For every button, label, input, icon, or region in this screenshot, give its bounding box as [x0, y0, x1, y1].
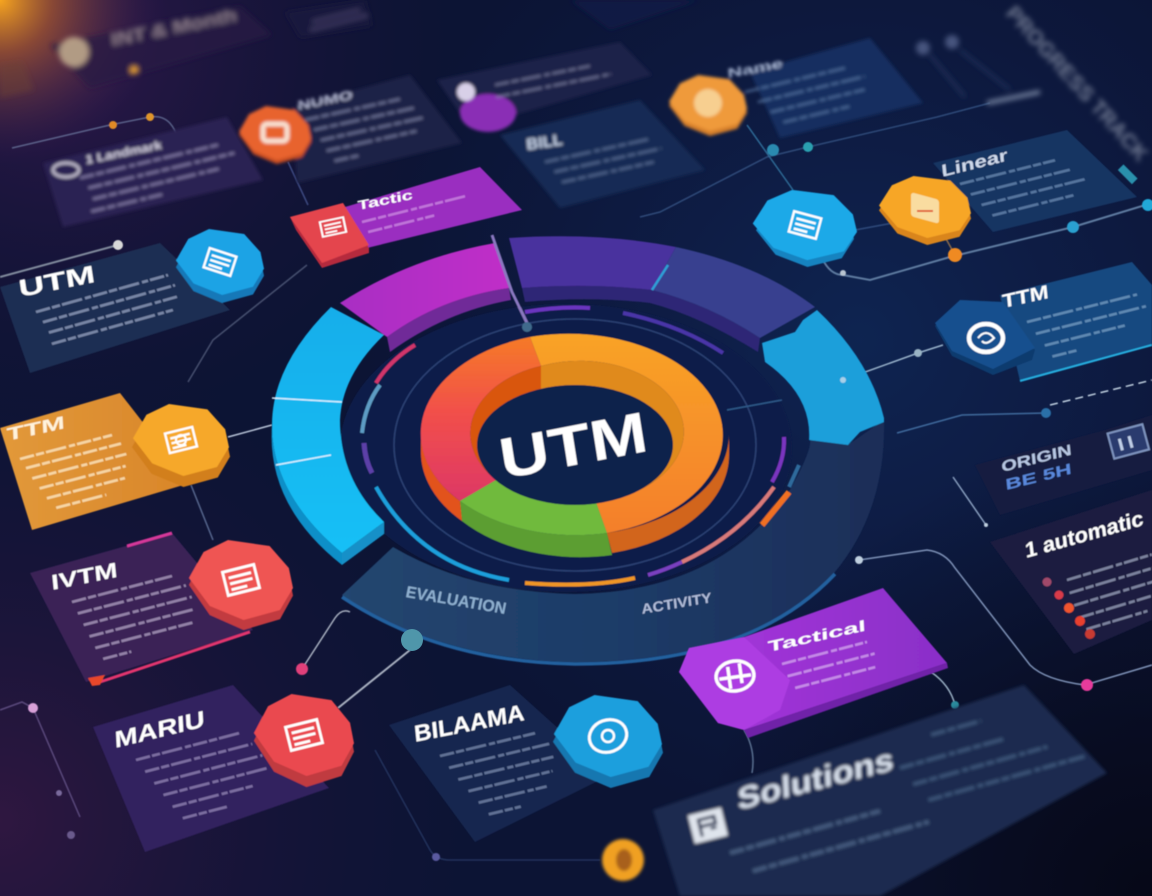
heading: MARIU — [114, 706, 205, 753]
panel: top right blurred vertical text: PROGRESS TRACK — [1001, 2, 1152, 167]
text lines — [1067, 554, 1152, 632]
segment: indigo top — [509, 236, 815, 352]
icon: navy hexagon — [935, 300, 1035, 375]
donut sides — [421, 434, 729, 557]
icon: red hexagon — [189, 540, 293, 630]
segment: blue right — [762, 310, 884, 445]
text lines — [20, 433, 136, 513]
text lines — [730, 800, 929, 875]
donut: red segment — [421, 337, 541, 501]
icon: orange coin — [602, 839, 644, 881]
heading: BILAAMA — [413, 699, 526, 747]
icon: purple blob — [460, 94, 516, 132]
icon: small frame — [1108, 424, 1149, 459]
connector stem — [492, 235, 528, 325]
icon: blue hexagon — [553, 695, 663, 788]
heading: NUMO — [297, 87, 353, 113]
heading: IVTM — [50, 558, 118, 595]
icon: red-orange hexagon — [239, 106, 311, 164]
heading: Tactical — [767, 618, 866, 656]
icon: yellow hexagon — [132, 404, 230, 487]
donut: green segment — [460, 480, 607, 535]
icon: yellow hexagon — [879, 176, 971, 245]
icon: blue hexagon — [176, 229, 264, 303]
text lines — [136, 729, 277, 825]
text lines — [305, 96, 430, 164]
heading: UTM: UTM — [17, 261, 97, 303]
icon: red hexagon — [254, 694, 354, 787]
panel: purple banner with red tag — [290, 167, 522, 268]
donut: inner wall — [470, 361, 684, 502]
arc accents — [362, 308, 799, 585]
heading: top-left: INT & Month — [110, 5, 237, 50]
heading: 1 automatic — [1024, 506, 1145, 563]
heading: Solutions — [737, 741, 894, 817]
panel: purple callout — [679, 588, 948, 738]
title: UTM: UTM — [495, 401, 652, 491]
inner dark disc — [340, 304, 792, 592]
text lines — [72, 573, 203, 662]
panel: top-left blurred — [0, 0, 700, 98]
panel: orange — [0, 393, 230, 530]
text lines — [362, 196, 469, 233]
icon: top-left badge — [59, 37, 89, 67]
panel: right small dark — [975, 415, 1152, 515]
bottom band sector — [342, 420, 884, 662]
panel: UTM navy — [0, 229, 264, 373]
panel: right small dark: BE 5H — [1005, 461, 1072, 494]
band rim — [342, 574, 835, 664]
text lines — [782, 641, 877, 690]
icon: red tag — [290, 203, 369, 268]
heading: TTM — [6, 412, 65, 445]
band label: right: ACTIVITY — [641, 589, 713, 617]
panel: right automatic — [990, 490, 1152, 654]
panel: top right orange hexagon — [669, 38, 923, 138]
panel: right TTM — [935, 262, 1152, 381]
icon: orange hexagon — [669, 75, 747, 136]
heading: ORIGIN — [1001, 442, 1072, 476]
panel: top right blurred vertical text — [916, 2, 1152, 167]
heading: upper left: 1 Landmark — [85, 138, 163, 167]
panel: purple MARIU — [93, 685, 354, 852]
icon: blue rounded hexagon — [756, 192, 854, 267]
thin ring — [394, 319, 756, 571]
text lines — [36, 274, 183, 345]
heading: Name — [727, 55, 783, 81]
icon: callout glyph — [714, 659, 756, 693]
icon: solutions badge — [688, 807, 728, 844]
panel: top middle with purple blob — [437, 42, 652, 132]
panel: right Linear — [879, 130, 1138, 245]
text lines — [960, 155, 1089, 220]
heading: BILL — [526, 131, 564, 154]
segment: blue left — [272, 307, 384, 565]
panel: dark purple IVTM — [30, 533, 293, 686]
panel: upper red-orange — [239, 75, 462, 183]
cross ticks — [727, 400, 782, 410]
icon: list dots — [1042, 578, 1095, 639]
segment: magenta top — [340, 243, 511, 352]
heading: TTM — [1001, 282, 1049, 313]
connector ball — [401, 629, 423, 651]
chart: central ring — [272, 235, 884, 664]
text lines — [78, 142, 243, 211]
heading: Tactic — [357, 187, 413, 213]
donut: orange segment — [530, 334, 723, 533]
panel: upper left purple — [43, 117, 263, 227]
icon: upper left badge — [53, 163, 79, 177]
hexagon tab — [679, 637, 790, 730]
text lines — [440, 731, 566, 821]
heading: Linear — [940, 145, 1009, 181]
panel: BILL upper — [500, 100, 705, 208]
panel: navy BILAAMA — [389, 685, 663, 842]
band label: left: EVALUATION — [404, 583, 508, 618]
panel: Solutions bottom — [653, 685, 1107, 896]
text lines — [1027, 293, 1152, 360]
donut: centre — [477, 385, 673, 505]
